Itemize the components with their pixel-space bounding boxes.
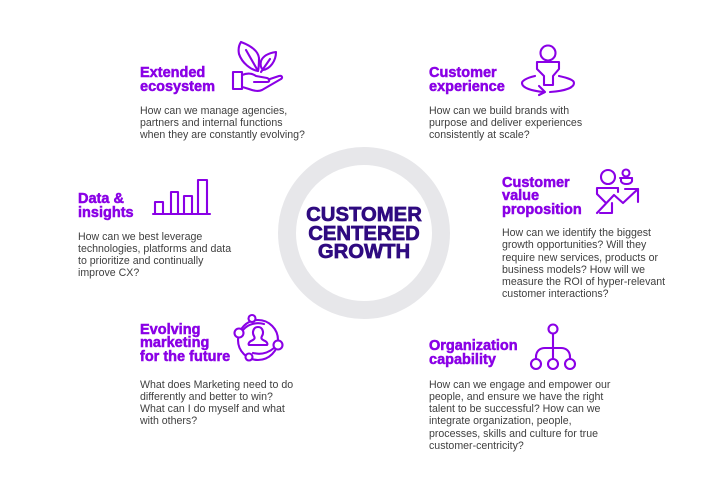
- text: data and insights: to prioritize and continually: [78, 255, 203, 267]
- text: customer value proposition: measure the ROI of hyper-relevant: [502, 276, 665, 288]
- text: extended ecosystem: How can we manage agencies,: [140, 104, 287, 116]
- heading: customer value proposition: [502, 174, 582, 218]
- text: customer experience: consistently at scale?: [429, 129, 530, 141]
- heading: data and insights: [78, 190, 134, 220]
- icon: plant in hand: [232, 40, 284, 92]
- heading: customer value proposition: Customer: [502, 174, 570, 190]
- center title: CUSTOMER: [306, 204, 422, 226]
- text: organization capability: talent to be successful? How can we: [429, 403, 600, 415]
- text: evolving marketing: What does Marketing need to do: [140, 378, 293, 390]
- text: customer experience: How can we build brands with: [429, 104, 569, 116]
- heading: extended ecosystem: ecosystem: [140, 79, 215, 95]
- text: evolving marketing: [140, 378, 293, 427]
- text: customer value proposition: growth opportunities? Will they: [502, 239, 646, 251]
- text: customer experience: purpose and deliver experiences: [429, 117, 582, 129]
- text: organization capability: customer-centricity?: [429, 440, 524, 452]
- heading: evolving marketing: marketing: [140, 335, 209, 351]
- heading: customer experience: Customer: [429, 65, 497, 81]
- text: customer experience: [429, 104, 582, 141]
- text: data and insights: technologies, platforms and data: [78, 243, 231, 255]
- heading: organization capability: capability: [429, 352, 496, 368]
- text: customer value proposition: [502, 227, 665, 300]
- heading: customer value proposition: value: [502, 188, 539, 204]
- text: organization capability: people, and ensure we have the right: [429, 391, 603, 403]
- heading: extended ecosystem: [140, 65, 215, 95]
- heading: customer experience: [429, 65, 505, 95]
- text: data and insights: improve CX?: [78, 267, 139, 279]
- text: data and insights: [78, 230, 232, 279]
- heading: customer experience: experience: [429, 79, 505, 95]
- heading: extended ecosystem: Extended: [140, 65, 205, 81]
- text: customer value proposition: require new services, products or: [502, 252, 658, 264]
- text: organization capability: [429, 378, 610, 452]
- heading: evolving marketing: [140, 322, 230, 365]
- heading: customer value proposition: proposition: [502, 202, 582, 218]
- heading: organization capability: [429, 338, 518, 368]
- heading: evolving marketing: for the future: [140, 349, 230, 365]
- text: customer value proposition: business models? How will we: [502, 264, 645, 276]
- icon: people with growth arrow: [596, 168, 640, 214]
- text: extended ecosystem: partners and internal functions: [140, 117, 283, 129]
- text: organization capability: processes, skills and culture for true: [429, 428, 598, 440]
- icon: person funnel: [520, 44, 575, 96]
- text: organization capability: How can we engage and empower our: [429, 378, 610, 390]
- icon: org hierarchy: [530, 324, 576, 370]
- text: organization capability: integrate organization, people,: [429, 415, 572, 427]
- center title: CENTERED: [308, 223, 420, 245]
- text: extended ecosystem: when they are constantly evolving?: [140, 129, 305, 141]
- heading: organization capability: Organization: [429, 338, 518, 354]
- text: evolving marketing: What can I do myself and what: [140, 403, 285, 415]
- heading: evolving marketing: Evolving: [140, 322, 200, 338]
- text: extended ecosystem: [140, 104, 305, 141]
- heading: data and insights: insights: [78, 204, 134, 220]
- center title: GROWTH: [318, 241, 410, 263]
- text: customer value proposition: customer interactions?: [502, 288, 609, 300]
- text: customer value proposition: How can we identify the biggest: [502, 227, 651, 239]
- center title: [306, 204, 422, 263]
- heading: data and insights: Data &: [78, 190, 124, 206]
- text: evolving marketing: differently and better to win?: [140, 391, 273, 403]
- text: data and insights: How can we best leverage: [78, 230, 202, 242]
- icon: bar chart: [152, 179, 211, 215]
- icon: person in orbit: [233, 314, 284, 362]
- center ring: [278, 147, 450, 319]
- text: evolving marketing: with others?: [140, 415, 197, 427]
